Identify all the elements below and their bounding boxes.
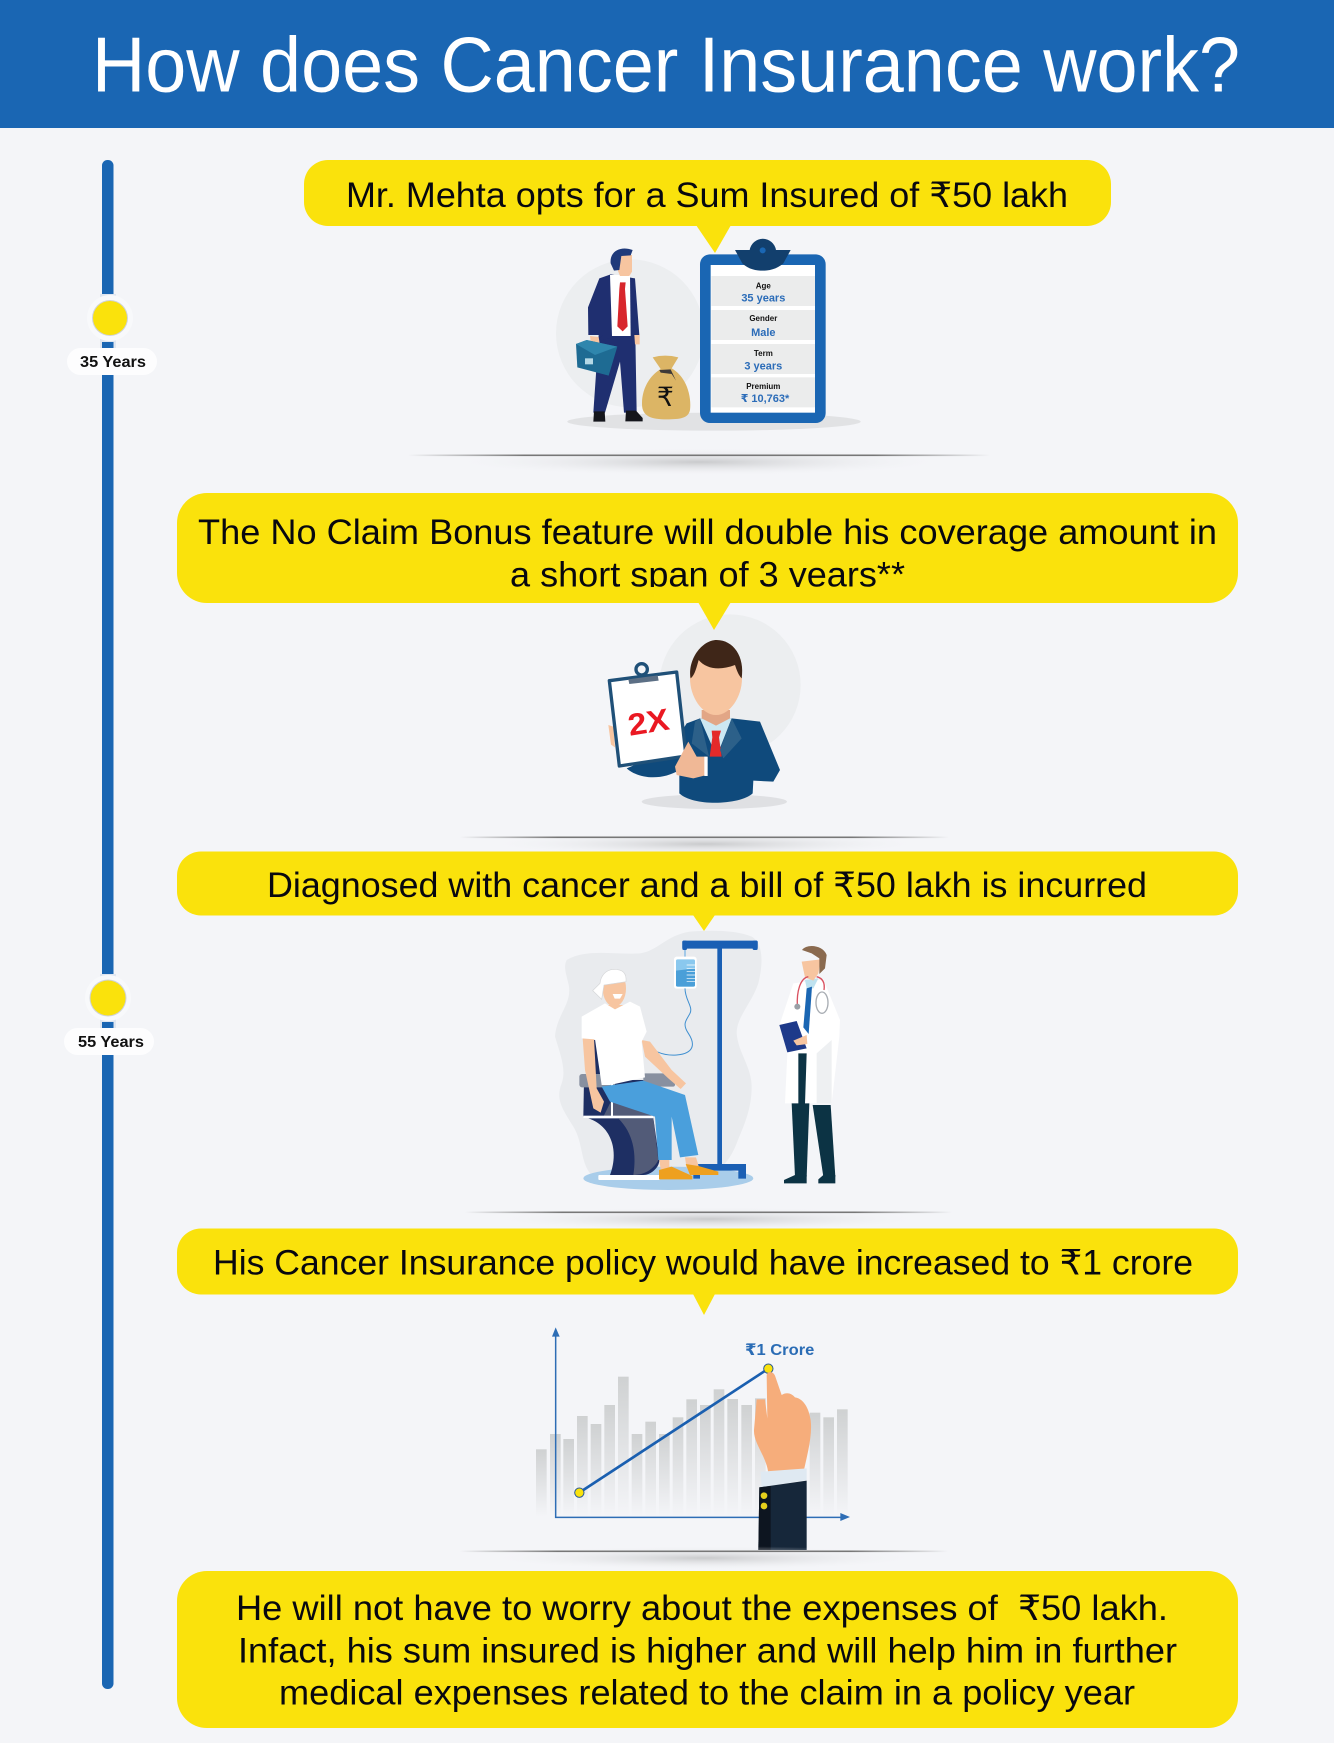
doctor [779, 946, 840, 1183]
callout 2: The No Claim Bonus feature will double his coverage amount in [198, 513, 1217, 552]
callout 1: Mr. Mehta opts for a Sum Insured of ₹50 lakh [346, 176, 1068, 215]
divider 4 [460, 1546, 948, 1570]
callout 5: Infact, his sum insured is higher and will help him in further [238, 1632, 1177, 1670]
divider 3 [465, 1207, 952, 1231]
clipboard form [700, 239, 826, 423]
timeline marker: 55 years [64, 974, 154, 1055]
callout 4: His Cancer Insurance policy would have increased to ₹1 crore [213, 1244, 1193, 1282]
divider 2 [460, 832, 949, 856]
clipboard 2X: 2X [625, 703, 672, 743]
callout 2 [177, 493, 1238, 630]
clipboard form: Term [754, 349, 773, 358]
illustration: man with clipboard and money bag: ₹ [657, 382, 674, 412]
clipboard form: Gender [749, 314, 777, 323]
clipboard form: ₹ 10,763* [741, 393, 790, 405]
clipboard 2X [609, 664, 686, 766]
timeline marker: 55 years: 55 Years [78, 1034, 144, 1051]
clipboard form: Male [751, 327, 776, 339]
callout 5: medical expenses related to the claim in a policy year [279, 1674, 1135, 1712]
IV pole and bag [645, 941, 758, 1179]
axes [552, 1327, 850, 1521]
trend line [575, 1364, 773, 1497]
callout 2: a short span of 3 years** [510, 556, 905, 594]
divider 1 [408, 448, 990, 476]
callout 4 [177, 1228, 1238, 1315]
patient in chair [579, 969, 718, 1179]
callout 1 [304, 160, 1111, 253]
illustration: man with clipboard and money bag [556, 239, 861, 431]
hand and sleeve [754, 1372, 811, 1550]
clipboard form: Premium [746, 382, 780, 391]
callout 5: He will not have to worry about the expenses of ₹50 lakh. [236, 1589, 1168, 1628]
value label: ₹1 Crore [745, 1342, 814, 1359]
clipboard form: 35 years [741, 292, 785, 304]
bars [536, 1377, 848, 1517]
illustration: patient on IV drip with doctor [555, 931, 840, 1190]
title: How does Cancer Insurance work? [92, 20, 1240, 108]
timeline [64, 160, 157, 1689]
illustration: growth chart with pointing hand [536, 1327, 850, 1550]
illustration: man holding 2X clipboard [608, 614, 801, 809]
callout 3: Diagnosed with cancer and a bill of ₹50 lakh is incurred [267, 866, 1147, 905]
header banner [0, 0, 1334, 128]
clipboard form: Age [756, 281, 771, 290]
timeline marker: 35 years [67, 294, 157, 375]
timeline marker: 35 years: 35 Years [80, 354, 146, 371]
callout 3 [177, 852, 1238, 931]
clipboard form: 3 years [744, 360, 782, 372]
callout 5 [177, 1571, 1238, 1728]
